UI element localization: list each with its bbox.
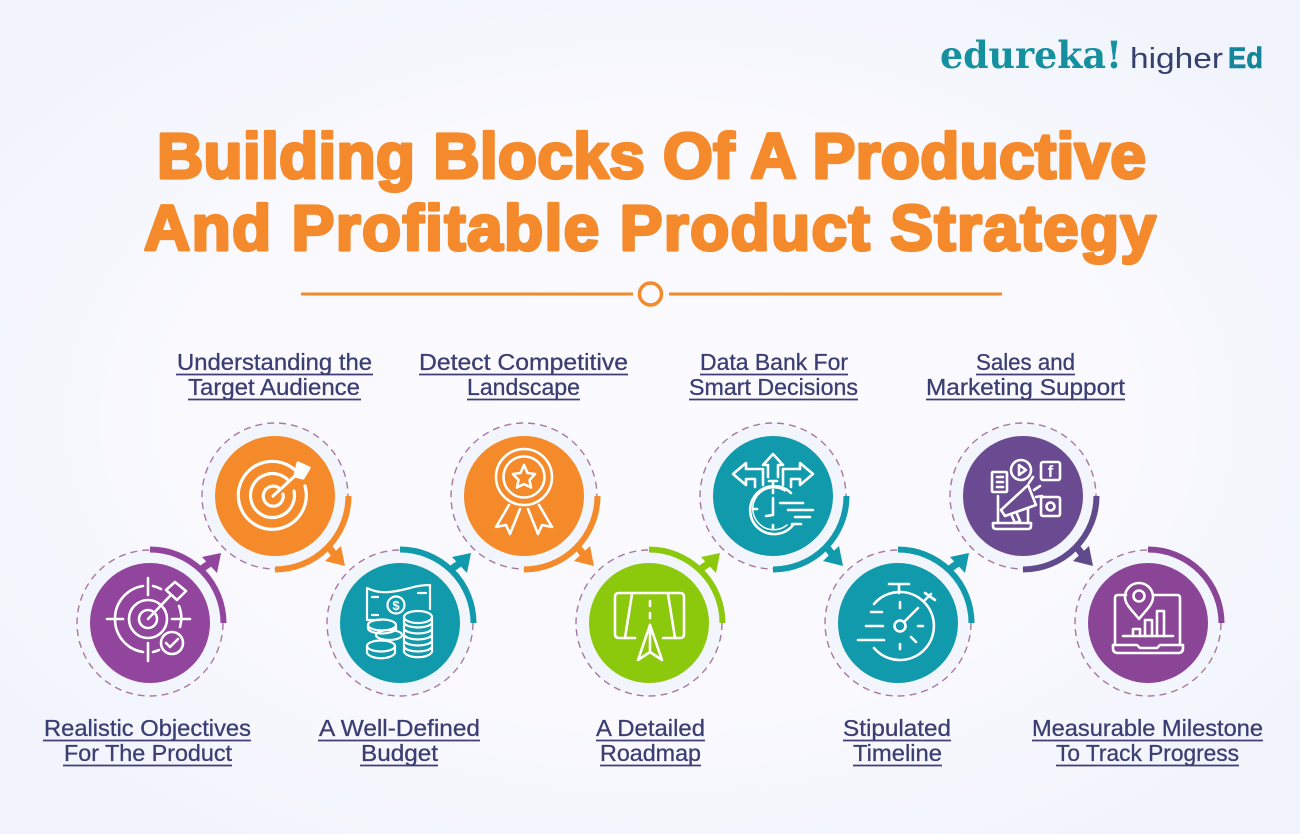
title [144,120,1156,264]
logo: edureka higherEd: higher [1130,43,1223,75]
step 4: detect competitive landscape [451,423,598,570]
arc arrow [400,550,474,623]
label: stipulated timeline: Stipulated [843,715,951,741]
label: understanding the target audience: Target Audience [188,374,360,400]
label: sales and marketing support: Marketing Support [926,374,1126,400]
icon: target with check [107,578,190,661]
label: stipulated timeline [843,715,951,766]
label: detailed roadmap: Roadmap [600,740,701,766]
label: stipulated timeline: Timeline [853,740,942,766]
icon: bullseye [238,461,309,529]
title: Building Blocks Of A Productive [157,120,1146,192]
label: measurable milestone [1032,715,1263,766]
logo: edureka higherEd: edureka! [940,33,1122,77]
label: sales and marketing support: Sales and [976,349,1075,375]
title: And Profitable Product Strategy [144,192,1156,264]
label: data bank for smart decisions [689,349,858,400]
icon: road and navigation arrow [615,593,684,660]
icon: award rosette [496,449,552,534]
icon: banknote and coins: $ [392,598,400,613]
arc arrow [275,496,348,570]
icon: megaphone and social media [992,460,1060,529]
icon: fast stopwatch [858,584,935,660]
step 3: well-defined budget [327,550,474,696]
icon: banknote and coins [367,585,432,658]
icon: laptop with pin and chart [1113,583,1183,653]
step 1: realistic objectives [77,550,224,696]
label: understanding the target audience: Understanding the [177,349,372,375]
label: detect competitive landscape: Landscape [467,374,580,400]
label: well-defined budget [318,715,480,766]
step 5: detailed roadmap [576,550,722,696]
arc arrow [524,496,598,570]
label: detailed roadmap: A Detailed [596,715,705,741]
arc arrow [649,550,722,623]
label: well-defined budget: A Well-Defined [319,715,480,741]
logo: edureka higherEd: Ed [1228,42,1263,75]
label: well-defined budget: Budget [361,740,439,766]
label: detailed roadmap [596,715,705,766]
arc arrow [898,550,972,623]
label: realistic objectives [43,715,251,766]
title divider [301,283,1002,305]
step 6: data bank for smart decisions [700,423,846,570]
label: detect competitive landscape: Detect Competitive [419,349,628,375]
icon: stopwatch with three arrows [733,454,813,534]
label: realistic objectives: Realistic Objectives [44,715,251,741]
arc arrow [150,550,224,623]
arc [1148,550,1222,623]
step 7: stipulated timeline [825,550,972,696]
label: realistic objectives: For The Product [64,740,233,766]
step 2: understanding the target audience [202,423,348,570]
icon: megaphone and social media: f [1048,462,1054,481]
arc arrow [773,496,846,570]
label: sales and marketing support [926,349,1126,400]
label: data bank for smart decisions: Data Bank For [700,349,848,375]
label: measurable milestone: Measurable Milestone [1032,715,1263,741]
step 8: sales and marketing support [950,423,1096,570]
label: data bank for smart decisions: Smart Decisions [689,374,858,400]
step 9: measurable milestone [1075,550,1222,696]
logo: edureka higherEd [940,33,1263,77]
label: detect competitive landscape [419,349,628,400]
arc arrow [1023,496,1096,570]
label: understanding the target audience [176,349,373,400]
label: measurable milestone: To Track Progress [1056,740,1239,766]
